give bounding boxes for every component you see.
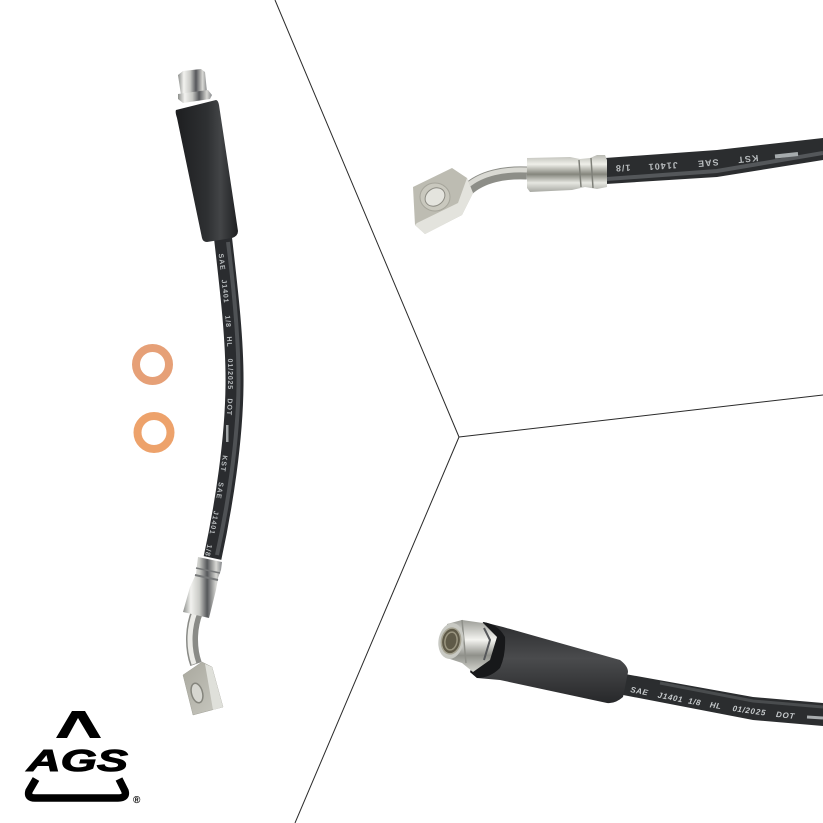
hose printing: HL — [710, 702, 720, 709]
divider lines — [275, 0, 823, 823]
hose printing: 01/2025 — [228, 358, 234, 389]
hose printing: SAE — [218, 254, 226, 270]
panel: threaded end detail — [438, 620, 823, 726]
hose printing: 1/8 — [206, 544, 212, 556]
hose printing — [206, 254, 234, 556]
logo wordmark: AGS — [25, 743, 128, 778]
bent tube — [467, 170, 527, 190]
hose printing: KST — [737, 153, 759, 165]
heat-shrink sleeve and rubber collar — [470, 622, 628, 703]
hose section — [623, 674, 823, 726]
panel: banjo end detail — [413, 138, 823, 234]
banjo tab — [413, 168, 473, 234]
hose printing — [615, 153, 759, 173]
logo top chevron — [56, 711, 101, 738]
hose printing: SAE — [630, 687, 648, 696]
hose printing: SAE — [216, 482, 224, 498]
bent tube — [190, 612, 197, 664]
hose highlight — [607, 153, 823, 179]
panel: full hose — [176, 69, 244, 716]
hose printing: SAE — [697, 157, 719, 169]
hose printing: KST — [220, 456, 228, 472]
hose printing: HL — [226, 336, 232, 346]
hose printing: 1/8 — [688, 698, 701, 706]
hose body — [212, 238, 239, 558]
logo bottom bracket — [29, 779, 125, 798]
banjo tab — [183, 662, 223, 715]
hose printing: J1401 — [647, 160, 678, 172]
icon: copper washer 1 — [136, 348, 169, 381]
icon: copper washer 2 — [138, 416, 170, 449]
hose printing: J1401 — [658, 692, 682, 702]
hose printing: DOT — [227, 398, 232, 416]
heat-shrink sleeve — [176, 100, 238, 242]
hose printing: 1/8 — [615, 163, 631, 173]
registered mark: ® — [133, 795, 141, 806]
white dash — [775, 154, 798, 156]
hose highlight — [660, 683, 823, 707]
top fitting — [178, 69, 212, 103]
hose printing: J1401 — [210, 510, 218, 534]
hose printing — [630, 687, 796, 719]
white dash — [807, 717, 823, 718]
hose printing: J1401 — [222, 280, 229, 302]
metal fitting — [436, 620, 497, 672]
white dash on hose — [226, 425, 228, 442]
crimp ferrule — [183, 557, 222, 618]
hose printing: 01/2025 — [732, 706, 766, 716]
crimp ferrule — [527, 155, 607, 192]
hose section — [605, 138, 823, 184]
hose printing: 1/8 — [225, 316, 231, 327]
hose printing: DOT — [776, 712, 796, 719]
logo: AGS — [25, 711, 141, 806]
